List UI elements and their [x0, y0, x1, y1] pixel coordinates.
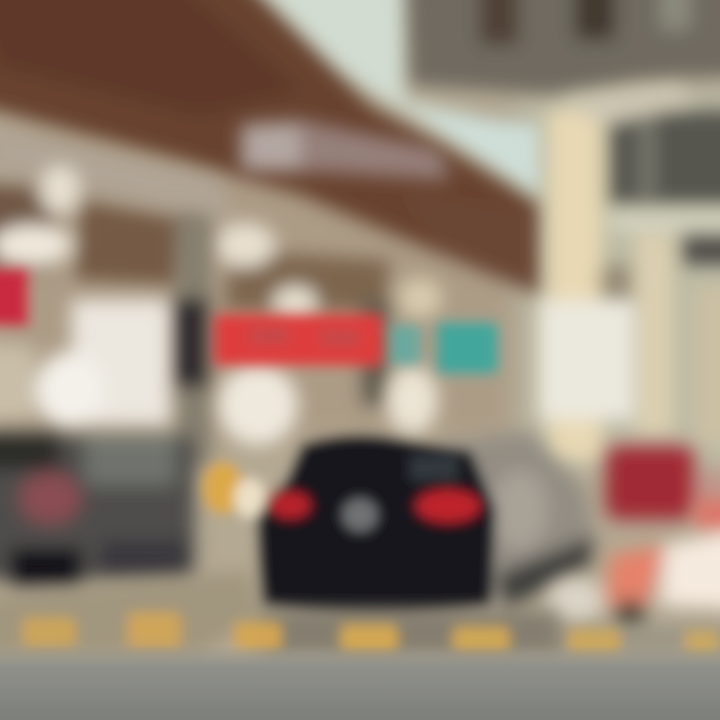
car emblem [341, 497, 379, 533]
white kiosk panels [0, 300, 635, 445]
central pillar [172, 215, 388, 465]
red sign center [214, 314, 382, 366]
teal sign [390, 322, 498, 374]
top right ceiling [405, 0, 720, 95]
hanging sign on ceiling band [240, 120, 450, 180]
background cars left [0, 432, 195, 586]
road surface [0, 645, 720, 720]
silver car [440, 430, 595, 610]
orange and white barrier [547, 500, 720, 631]
yellow kerb stripes [22, 612, 720, 654]
red sign left [0, 268, 28, 326]
black car [258, 436, 494, 614]
upper skylight [215, 0, 540, 200]
left tail light [268, 490, 312, 520]
right tail light [414, 488, 482, 524]
red car right [605, 445, 720, 520]
left beam and lights [0, 125, 442, 318]
brown ceiling band [0, 0, 540, 295]
yellow marker [202, 462, 266, 518]
right pillars [548, 85, 720, 460]
kerb ground [0, 570, 720, 655]
